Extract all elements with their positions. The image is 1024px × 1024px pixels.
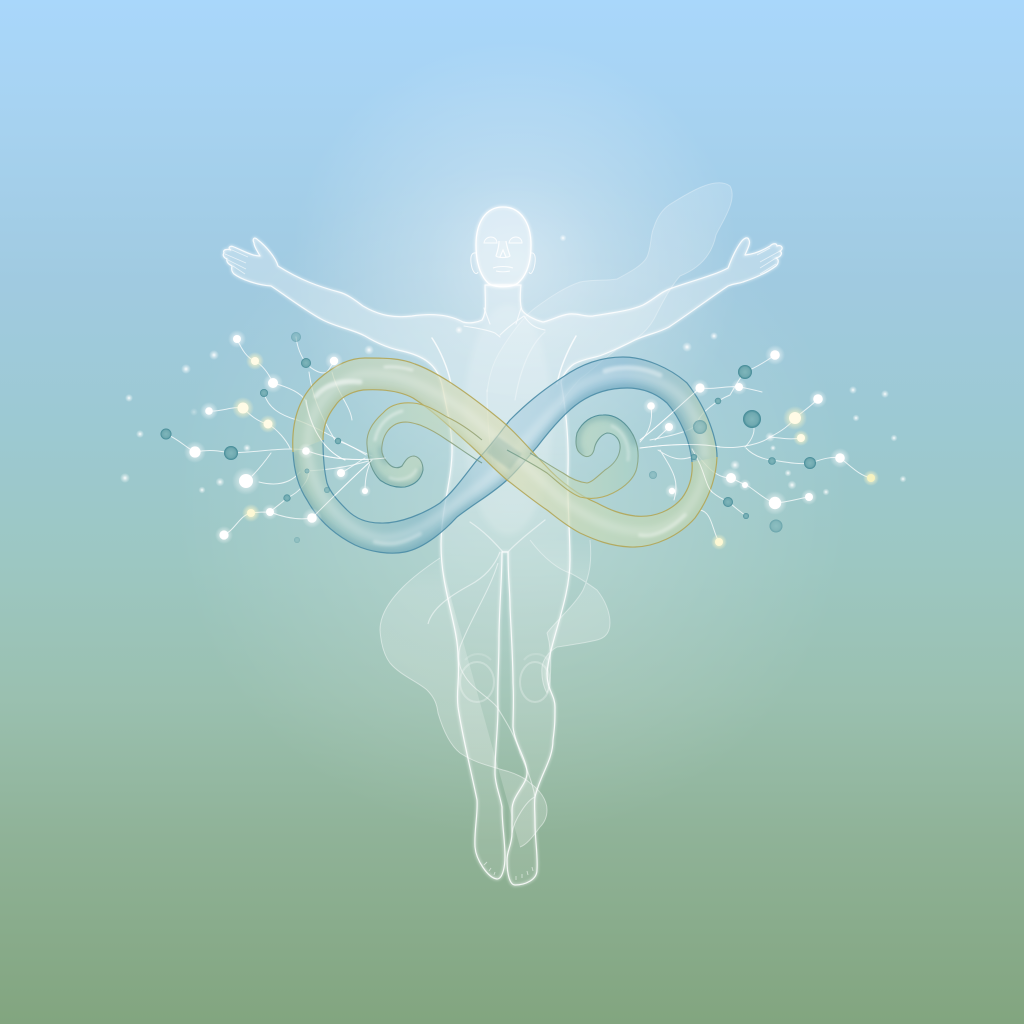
toes [484,862,533,880]
yellow glow nodes left [232,352,277,522]
white nodes right [643,345,850,515]
veil: inner edge of swirl [459,563,535,833]
veil: upper right wing [487,183,732,405]
nose [496,241,510,258]
white nodes left [184,330,371,544]
nodes: right cluster [643,332,906,550]
band: blue loop [293,357,717,553]
head [471,207,535,287]
eyes [484,237,522,243]
centre crossing shadow [486,436,522,470]
nodes: left cluster [120,234,566,544]
teal nodes left [160,332,341,543]
mouth [493,266,513,272]
right spiral [507,415,638,498]
left branching lines [166,434,385,484]
sparkles right [682,332,906,496]
network lines over the loop [305,388,720,518]
teal nodes right [649,365,816,532]
band: gold loop [293,358,717,547]
tube highlights [316,367,685,544]
hand finger lines [225,248,780,274]
veil: thigh ribbon stroke [428,552,500,624]
veil: lower right swirl [530,540,610,693]
body glow [223,238,782,885]
flowing veil behind the figure [380,183,732,847]
infinity loop [293,357,717,553]
sparkles left [120,234,566,494]
veil: lower left swirl [380,558,547,847]
right branching lines [640,399,818,448]
network lines behind the infinity loop [166,337,871,542]
left spiral [367,403,482,487]
body silhouette [223,238,782,885]
yellow glow nodes right [711,406,879,550]
ears [471,253,535,274]
torso centre glow [464,305,552,535]
chest and neck lines [432,308,576,552]
human figure [223,207,782,885]
knee rings [460,654,550,702]
